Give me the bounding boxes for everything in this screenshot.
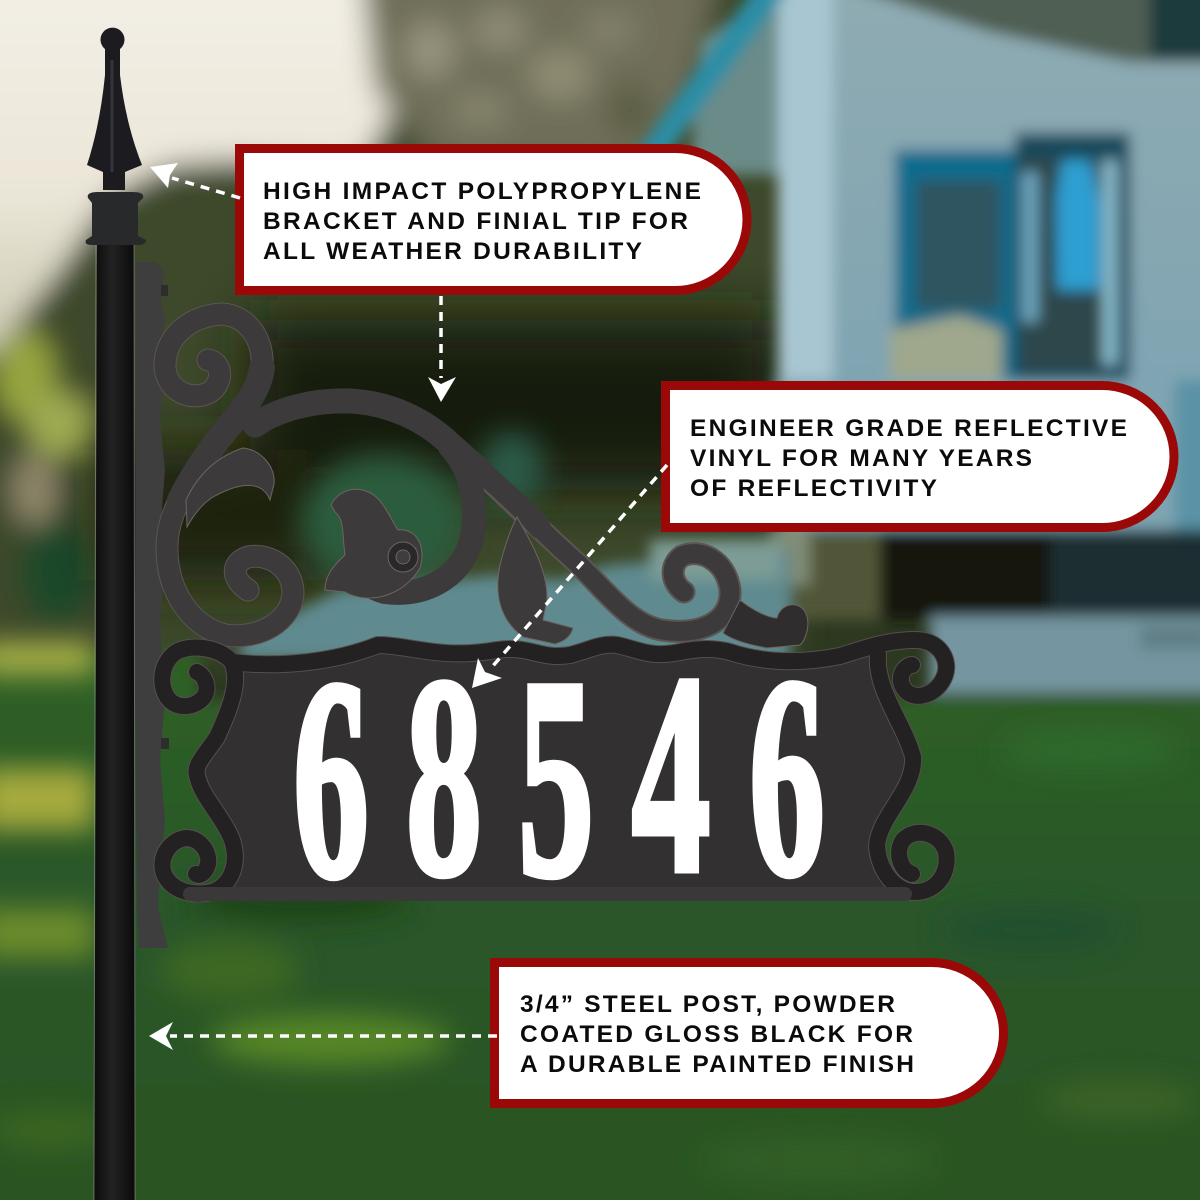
callout: steel post: 3/4” STEEL POST, POWDER [520,991,895,1018]
callout: steel post: COATED GLOSS BLACK FOR [520,1021,913,1048]
ornamental scrollwork [165,314,730,636]
callout: polypropylene bracket and finial [240,148,747,290]
leaf and rosette details [186,448,808,648]
callout: reflective vinyl: VINYL FOR MANY YEARS [690,445,1032,472]
callout: steel post: A DURABLE PAINTED FINISH [520,1051,914,1078]
arrow: bracket callout pointer [428,296,456,402]
house number 68546: 4 [632,615,710,932]
callout: reflective vinyl: OF REFLECTIVITY [690,475,937,502]
finial tip [87,28,142,190]
sign post with finial [86,28,146,1200]
wall bracket plate [135,262,169,948]
callout: reflective vinyl [666,386,1174,528]
house number 68546: 5 [518,619,594,936]
house number 68546: 6 [749,618,825,935]
callout: polypropylene bracket and finial: ALL WEATHER DURABILITY [263,238,642,265]
house number 68546 [293,615,825,937]
callout: reflective vinyl: ENGINEER GRADE REFLECTIVE [690,415,1127,442]
house number 68546: 8 [406,618,482,935]
arrow: reflective vinyl pointer [472,465,667,688]
callout: polypropylene bracket and finial: BRACKET AND FINIAL TIP FOR [263,208,688,235]
plaque frame and corner scrolls [162,640,947,894]
address plaque [162,615,947,937]
arrow: steel post pointer [149,1022,497,1050]
arrow: finial callout pointer [150,163,240,198]
house number 68546: 6 [293,620,369,937]
callout: polypropylene bracket and finial: HIGH IMPACT POLYPROPYLENE [263,178,701,205]
post collar [86,192,146,245]
plaque face [197,645,913,893]
callout: steel post [494,962,1004,1104]
steel post [94,240,135,1200]
